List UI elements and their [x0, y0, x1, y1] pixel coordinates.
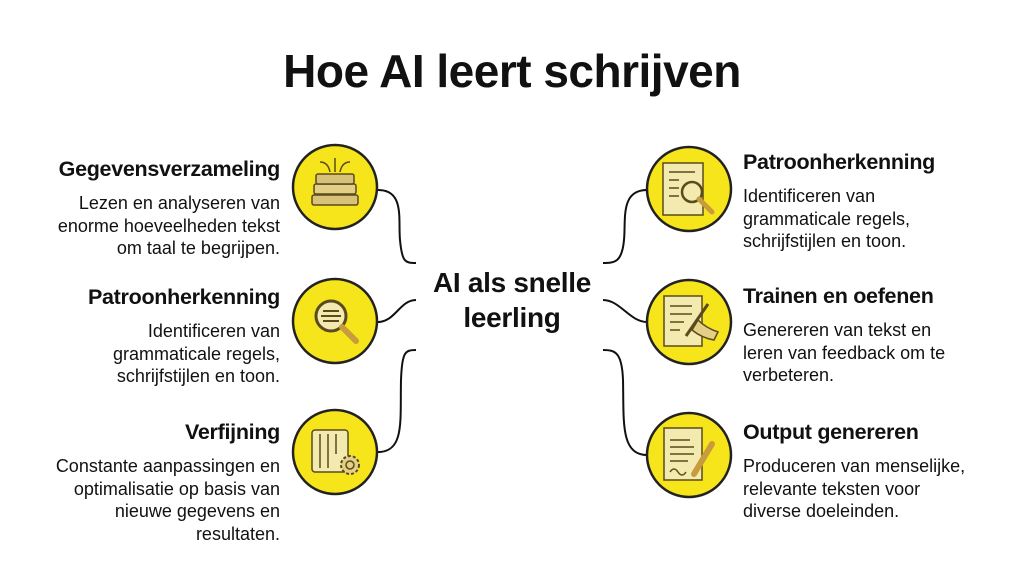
block: Patroonherkenning right: grammaticale regels, — [743, 208, 910, 228]
icon: sliders gear — [293, 410, 377, 494]
block: Gegevensverzameling — [58, 157, 280, 258]
block: Output genereren: diverse doeleinden. — [743, 501, 899, 521]
center label: leerling — [463, 302, 561, 333]
block: Output genereren: Produceren van menselijke, — [743, 456, 965, 476]
icon: document search — [647, 147, 731, 231]
block: Trainen en oefenen: leren van feedback om te — [743, 342, 945, 362]
icon: document pen — [647, 413, 731, 497]
block: Patroonherkenning left: grammaticale regels, — [113, 344, 280, 364]
block: Verfijning: Verfijning — [185, 420, 280, 444]
block: Gegevensverzameling: Gegevensverzameling — [59, 157, 280, 181]
block: Verfijning: nieuwe gegevens en — [115, 501, 280, 521]
block: Patroonherkenning left — [88, 285, 280, 386]
connectors — [378, 190, 647, 455]
center label: AI als snelle — [433, 267, 591, 298]
block: Patroonherkenning right: Identificeren van — [743, 186, 875, 206]
block: Trainen en oefenen — [743, 284, 945, 385]
center label — [433, 267, 591, 333]
block: Trainen en oefenen: Genereren van tekst en — [743, 320, 931, 340]
icon: writing hand — [647, 280, 731, 364]
block: Verfijning: resultaten. — [196, 524, 280, 544]
block: Output genereren: Output genereren — [743, 420, 919, 444]
block: Gegevensverzameling: enorme hoeveelheden tekst — [58, 216, 280, 236]
block: Patroonherkenning right: Patroonherkenning — [743, 150, 935, 174]
block: Verfijning: Constante aanpassingen en — [56, 456, 280, 476]
icon: books — [293, 145, 377, 229]
block: Patroonherkenning right: schrijfstijlen en toon. — [743, 231, 906, 251]
block: Output genereren: relevante teksten voor — [743, 478, 920, 498]
block: Trainen en oefenen: Trainen en oefenen — [743, 284, 934, 308]
block: Verfijning — [56, 420, 280, 544]
title: Hoe AI leert schrijven — [283, 45, 741, 97]
block: Gegevensverzameling: Lezen en analyseren van — [79, 193, 280, 213]
block: Patroonherkenning left: schrijfstijlen en toon. — [117, 366, 280, 386]
block: Gegevensverzameling: om taal te begrijpen. — [117, 238, 280, 258]
block: Trainen en oefenen: verbeteren. — [743, 365, 834, 385]
block: Patroonherkenning right — [743, 150, 935, 251]
block: Output genereren — [743, 420, 965, 521]
block: Patroonherkenning left: Patroonherkenning — [88, 285, 280, 309]
block: Verfijning: optimalisatie op basis van — [74, 478, 280, 498]
icon: magnifier — [293, 279, 377, 363]
block: Patroonherkenning left: Identificeren van — [148, 321, 280, 341]
